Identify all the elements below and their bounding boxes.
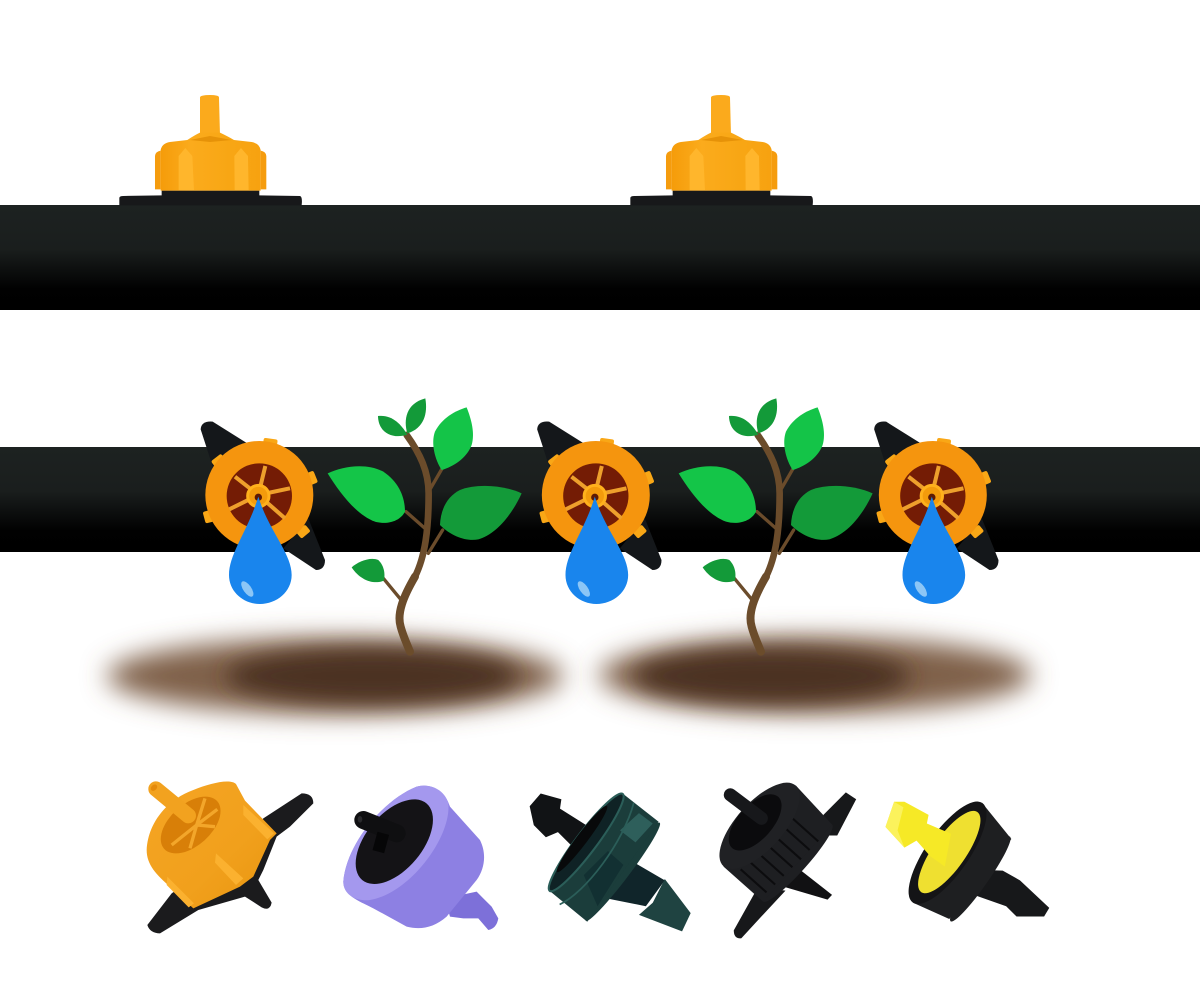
product: yellow and black emitter — [885, 791, 1049, 926]
soil patch, right — [599, 637, 1031, 713]
product: purple emitter — [341, 785, 498, 930]
product: black emitter — [706, 770, 856, 938]
plant, right — [679, 398, 873, 652]
lower pipe — [0, 447, 1200, 552]
soil patch, left — [107, 638, 563, 714]
dripping emitter 1 — [201, 422, 325, 604]
product: orange emitter — [147, 782, 313, 933]
product: dark green emitter — [530, 788, 691, 931]
top emitter, left — [119, 95, 302, 205]
top emitter, right — [630, 95, 813, 205]
dripping emitter 3 — [874, 422, 998, 604]
top pipe — [0, 205, 1200, 310]
plant, left — [328, 398, 522, 652]
dripping emitter 2 — [537, 422, 661, 604]
